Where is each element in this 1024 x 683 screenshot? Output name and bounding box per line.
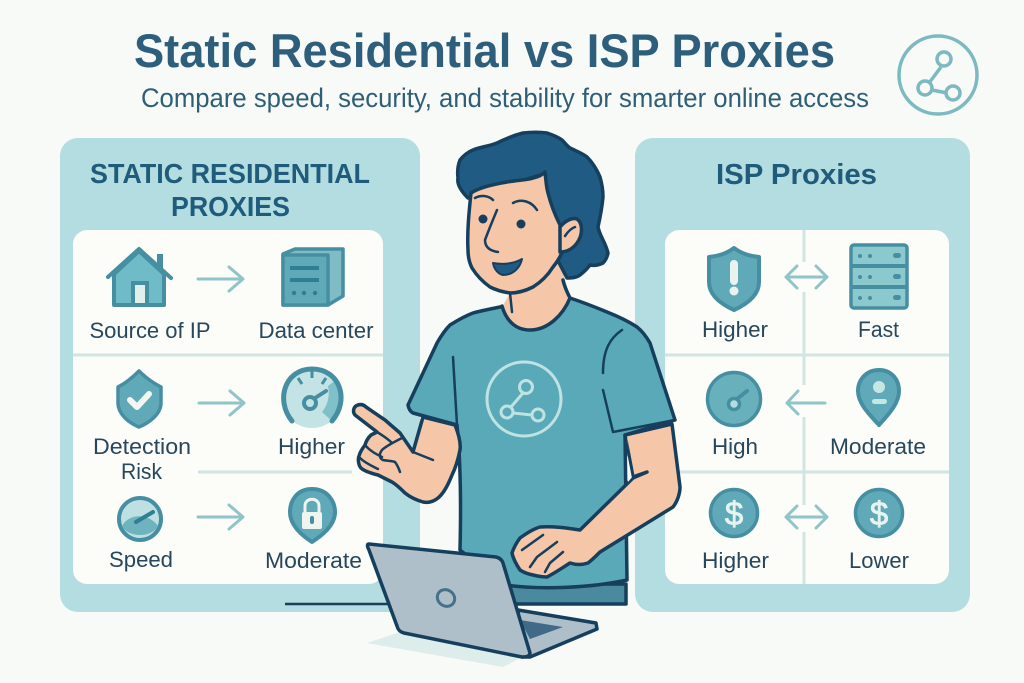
heading: static residential proxies: PROXIES (171, 191, 290, 222)
arrow: row 1 (198, 267, 243, 291)
desk line (285, 603, 626, 605)
label: lower: Lower (849, 548, 909, 573)
label: data center: Data center (258, 318, 374, 343)
laptop logo (434, 586, 458, 610)
face (468, 172, 562, 293)
arm inner gap (627, 437, 633, 482)
laptop lid (368, 544, 530, 657)
label: high: High (712, 434, 758, 459)
label: moderate: Moderate (830, 434, 926, 459)
label: detection risk (93, 434, 191, 484)
arrow: two-way row 1 (786, 266, 827, 288)
arrow: row 2 (199, 391, 244, 415)
shirt logo (487, 362, 561, 436)
label: detection risk: Risk (121, 459, 163, 484)
icon: data center (283, 249, 343, 305)
arrow: row 3 (198, 505, 243, 529)
icon: lock pin (290, 489, 335, 542)
trousers (505, 584, 626, 604)
heading: static residential proxies (90, 158, 370, 222)
heading: ISP proxies: ISP Proxies (716, 159, 877, 191)
label: moderate: Moderate (265, 548, 362, 573)
facial features (475, 196, 537, 275)
panel: static residential proxies (60, 138, 420, 612)
heading: static residential proxies: STATIC RESIDENTIAL (90, 158, 370, 189)
icon: speed gauge (119, 498, 161, 540)
label: source of IP: Source of IP (90, 318, 210, 343)
label: fast: Fast (858, 317, 899, 342)
icon: server (851, 245, 907, 308)
icon: dollar lower (856, 490, 902, 536)
laptop base (518, 610, 597, 657)
label: higher: Higher (278, 434, 345, 459)
label: speed: Speed (109, 547, 173, 572)
icon: shield alert (709, 248, 759, 310)
icon: network logo (899, 36, 977, 114)
ear (560, 218, 582, 252)
person illustration (354, 132, 680, 604)
panel: ISP proxies (635, 138, 970, 612)
label: higher: Higher (702, 317, 768, 342)
arrow: left row 2 (787, 391, 825, 414)
title: Static Residential vs ISP Proxies (134, 24, 835, 77)
pointing arm and hand (354, 405, 460, 502)
icon: house (108, 249, 171, 305)
icon: dollar higher: $ (725, 495, 743, 532)
finger lines (360, 417, 433, 472)
laptop (367, 544, 597, 667)
icon: dollar higher (710, 490, 758, 536)
hair back (458, 132, 608, 278)
icon: gauge higher (282, 368, 342, 428)
resting hand and arm (512, 424, 680, 577)
arrow: two-way row 3 (786, 506, 827, 528)
laptop shadow (367, 632, 522, 667)
subtitle: Compare speed, security, and stability for smarter online access (141, 83, 869, 113)
icon: location pin (858, 370, 899, 425)
icon: dollar lower: $ (870, 495, 888, 532)
icon: shield check (118, 371, 161, 427)
neck (502, 262, 570, 330)
t-shirt (408, 298, 675, 588)
laptop screen (520, 620, 563, 639)
label: higher: Higher (702, 548, 769, 573)
icon: gauge high (708, 372, 760, 426)
shirt folds (453, 330, 675, 432)
label: detection risk: Detection (93, 434, 191, 459)
